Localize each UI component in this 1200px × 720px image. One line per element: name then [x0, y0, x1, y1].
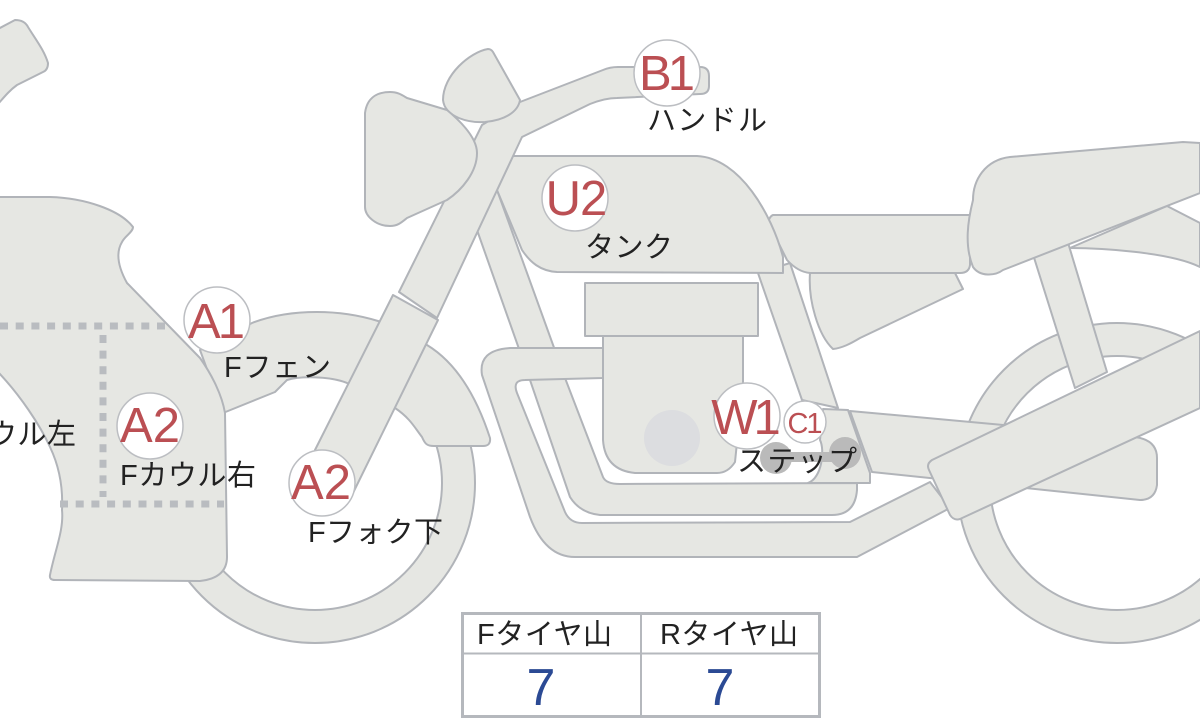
- exhaust pipe inner and down tube: [477, 190, 857, 515]
- label tank: タンク: [585, 232, 673, 264]
- rear tire header: Rタイヤ山: [660, 619, 798, 651]
- front wheel: [155, 323, 475, 643]
- upper fork and handlebar: [399, 67, 709, 318]
- marker A1: [184, 287, 250, 353]
- side cover: [810, 273, 963, 349]
- fuel tank: [497, 156, 783, 273]
- marker A2 right cowl: A2: [120, 399, 180, 453]
- marker U2: U2: [546, 172, 606, 226]
- front tire header: Fタイヤ山: [477, 619, 612, 651]
- label cowl right: Fカウル右: [120, 459, 256, 492]
- marker A2 fork: A2: [291, 456, 351, 510]
- windscreen: [0, 20, 48, 104]
- rear sub frame band: [928, 331, 1200, 520]
- label step: ステップ: [737, 446, 857, 478]
- meter: [443, 49, 520, 122]
- engine top block: [585, 283, 758, 336]
- seat: [968, 142, 1200, 275]
- swingarm: [850, 411, 1157, 500]
- mid seat panel: [768, 215, 970, 273]
- headlight: [365, 92, 477, 226]
- front cowl: [0, 197, 227, 581]
- engine lower block: [603, 336, 743, 473]
- exhaust pipe outer: [482, 348, 950, 557]
- marker C1: [784, 401, 826, 443]
- footrest plate: [808, 409, 870, 483]
- marker B1: [634, 40, 700, 106]
- rear frame tube: [758, 263, 838, 408]
- generator cover: [644, 410, 700, 466]
- marker A1: A1: [188, 295, 243, 349]
- label front fender: Fフェン: [224, 352, 331, 384]
- tire tread table: [462, 613, 820, 717]
- label fork lower: Fフォク下: [308, 517, 443, 549]
- rear shock: [1031, 236, 1107, 388]
- label handle: ハンドル: [647, 105, 767, 137]
- marker W1: W1: [711, 391, 778, 445]
- marker B1: B1: [639, 47, 693, 101]
- footrest pegs: [760, 437, 861, 474]
- rear wheel: [957, 323, 1200, 643]
- fork lower: [315, 295, 438, 493]
- marker C1: C1: [787, 408, 821, 440]
- front fender: [200, 312, 490, 446]
- rear tire value: 7: [706, 659, 734, 717]
- cowl divider dotted lines: [0, 326, 224, 504]
- tail section: [1070, 206, 1200, 267]
- front tire value: 7: [527, 659, 555, 717]
